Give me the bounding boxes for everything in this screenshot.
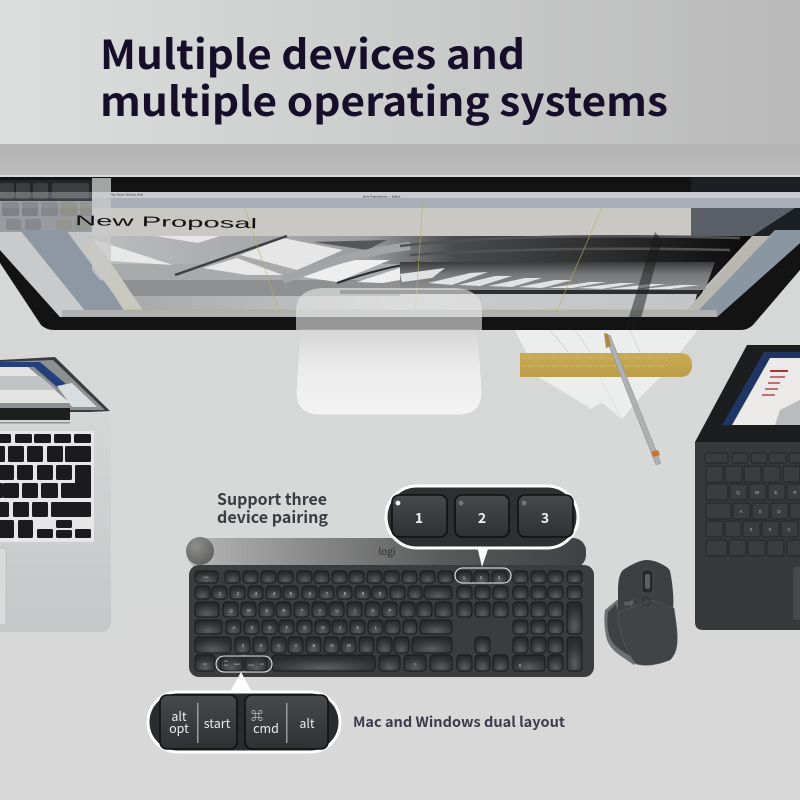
tablet keys: C bbox=[787, 527, 791, 532]
key 3: 3 bbox=[541, 508, 549, 528]
key row 4: F bbox=[286, 625, 289, 630]
mouse body bbox=[618, 560, 677, 665]
tablet keys: D bbox=[777, 509, 781, 514]
key row 5: V bbox=[295, 643, 298, 648]
key row 5: N bbox=[330, 643, 334, 648]
key row 4: L bbox=[375, 625, 378, 630]
callout: dual layout keys bbox=[148, 672, 340, 752]
key row 6: opt bbox=[224, 663, 228, 667]
key row 3: O bbox=[371, 608, 375, 613]
key row 4: A bbox=[233, 625, 236, 630]
callout: device pairing keys bbox=[386, 486, 578, 567]
capsule bbox=[148, 692, 340, 752]
key row 3: E bbox=[266, 608, 269, 613]
pale reflection strip bbox=[62, 310, 717, 317]
key row 5: B bbox=[313, 643, 316, 648]
laptop keyboard bbox=[0, 431, 94, 542]
mouse thumb rest bbox=[604, 600, 650, 665]
key 1: 1 bbox=[415, 508, 423, 528]
mouse logo: logi bbox=[624, 600, 635, 608]
key row 3: Y bbox=[319, 608, 322, 613]
key alt opt start bbox=[160, 695, 237, 749]
key row 5 bbox=[195, 637, 582, 671]
keyboard dial bbox=[186, 537, 214, 565]
monitor bbox=[0, 144, 800, 330]
ring: device keys bbox=[455, 568, 511, 583]
ring: modifier keys bbox=[216, 656, 272, 672]
key alt opt start: start bbox=[204, 713, 231, 732]
top menu bar bbox=[0, 192, 800, 208]
mouse thumb button bbox=[643, 598, 650, 605]
skylight slivers bbox=[400, 268, 700, 289]
monitor stand bbox=[296, 330, 482, 415]
top-right dark reflection bbox=[691, 177, 800, 243]
translucent laptop edge reflection bbox=[92, 178, 111, 280]
slide architecture photo bbox=[90, 236, 752, 310]
tablet bbox=[695, 345, 800, 630]
tablet keys: E bbox=[774, 490, 778, 495]
key row 1: 3 bbox=[498, 575, 501, 580]
skylight band bbox=[400, 262, 715, 290]
key row 6: ctrl bbox=[203, 662, 207, 666]
key row 2: 5 bbox=[290, 591, 293, 596]
key row 3: Q bbox=[229, 608, 233, 613]
key 1 bbox=[392, 495, 447, 537]
title band background bbox=[0, 0, 800, 144]
tablet trackpad bbox=[793, 567, 800, 620]
key row 1: 2 bbox=[480, 575, 483, 580]
key cmd alt bbox=[245, 695, 328, 749]
tablet keys: A bbox=[739, 509, 743, 514]
key row 3: R bbox=[282, 608, 286, 613]
key row 2: 6 bbox=[309, 591, 312, 596]
key row 6 bbox=[195, 655, 563, 671]
key row 6: alt bbox=[224, 659, 228, 663]
laptop body bbox=[0, 412, 111, 632]
key row 2 bbox=[195, 586, 582, 599]
key row 2: 2 bbox=[237, 591, 240, 596]
key row 5: Z bbox=[242, 643, 245, 648]
laptop hinge bbox=[0, 408, 70, 424]
key row 2: 0 bbox=[379, 591, 382, 596]
key row 1: 1 bbox=[463, 575, 466, 580]
slide page right side bbox=[691, 208, 795, 236]
mouse scroll wheel bbox=[642, 570, 653, 593]
key row 1 bbox=[195, 571, 582, 583]
title: Multiple devices and bbox=[100, 23, 525, 81]
key cmd alt: ⌘ bbox=[251, 707, 263, 724]
key row 6: start bbox=[234, 662, 240, 666]
slide page bbox=[92, 208, 691, 236]
key row 5: M bbox=[347, 643, 351, 648]
laptop bbox=[0, 357, 111, 632]
key row 4 bbox=[195, 620, 563, 634]
key row 4: J bbox=[339, 625, 341, 630]
beige slide edge right bbox=[686, 236, 770, 312]
key 2 bbox=[455, 495, 509, 537]
tablet keyboard cover bbox=[695, 442, 800, 630]
tablet keys: S bbox=[758, 509, 762, 514]
key row 2: 9 bbox=[362, 591, 365, 596]
mouse bbox=[604, 560, 677, 665]
key row 6: cmd bbox=[248, 663, 254, 667]
top-left laptop reflection bbox=[0, 180, 92, 317]
key row 3: I bbox=[354, 608, 356, 613]
brass ruler bbox=[520, 353, 692, 377]
yellow guide lines bbox=[125, 200, 690, 315]
monitor silver top bezel bbox=[0, 144, 800, 176]
key 3 bbox=[518, 495, 573, 537]
key row 2: 8 bbox=[344, 591, 347, 596]
key alt opt start: opt bbox=[169, 718, 189, 737]
top menu bar: New Proposal.key — Edited bbox=[363, 194, 401, 198]
beige slide edge left bbox=[85, 238, 143, 312]
key row 4: G bbox=[303, 625, 307, 630]
tablet keys: W bbox=[755, 490, 760, 495]
monitor black frame bbox=[0, 177, 800, 330]
laptop screen bbox=[0, 357, 110, 413]
capsule bbox=[386, 486, 578, 548]
key 2: 2 bbox=[478, 508, 486, 528]
mouse thumb rest inner bbox=[607, 604, 632, 657]
key row 1: esc bbox=[204, 575, 209, 579]
top menu bar: Play Share Window Help bbox=[110, 192, 144, 196]
tablet keys: Z bbox=[750, 527, 753, 532]
slide title: New Proposal bbox=[75, 212, 257, 231]
key row 6: 0 bbox=[519, 663, 522, 668]
key row 5: C bbox=[277, 643, 281, 648]
key row 3: P bbox=[389, 608, 392, 613]
key row 3: U bbox=[335, 608, 339, 613]
key row 6: alt bbox=[260, 662, 264, 666]
papers bbox=[512, 325, 702, 420]
label: support three device pairing: Support three bbox=[217, 486, 327, 510]
key row 3 bbox=[195, 602, 582, 634]
pointer bbox=[477, 546, 489, 567]
key row 4: S bbox=[251, 625, 254, 630]
keyboard bbox=[186, 537, 594, 677]
key row 6: fn bbox=[414, 662, 417, 666]
tablet keys bbox=[705, 453, 800, 556]
title: multiple operating systems bbox=[100, 70, 668, 128]
key row 4: K bbox=[357, 625, 360, 630]
mouse lower shell bbox=[618, 600, 677, 665]
title bbox=[100, 23, 668, 128]
key row 2: 3 bbox=[255, 591, 258, 596]
key cmd alt: cmd bbox=[253, 718, 279, 737]
label: support three device pairing: device pairing bbox=[217, 504, 328, 528]
key row 3: T bbox=[301, 608, 304, 613]
pen reflection bbox=[625, 232, 662, 330]
key row 5: X bbox=[260, 643, 263, 648]
monitor stand ghost bbox=[296, 288, 482, 330]
keyboard body bbox=[189, 565, 594, 677]
key row 4: D bbox=[268, 625, 272, 630]
key cmd alt: alt bbox=[299, 713, 315, 732]
tablet screen bbox=[695, 345, 800, 442]
keyboard top panel bbox=[187, 538, 586, 568]
label: mac and windows dual layout: Mac and Windows dual layout bbox=[353, 712, 565, 732]
pointer bbox=[230, 672, 252, 692]
key alt opt start: alt bbox=[171, 706, 187, 725]
laptop trackpad bbox=[0, 548, 6, 625]
key row 3: W bbox=[247, 608, 252, 613]
tablet keys: Q bbox=[736, 490, 740, 495]
blue side strips bbox=[20, 230, 800, 317]
key row 2: 1 bbox=[219, 591, 222, 596]
tablet keys: R bbox=[793, 490, 797, 495]
key row 4: H bbox=[321, 625, 325, 630]
monitor screen bbox=[0, 177, 800, 330]
label: support three device pairing bbox=[217, 486, 328, 528]
pen bbox=[604, 333, 661, 465]
key row 2: 4 bbox=[273, 591, 276, 596]
tablet keys: X bbox=[768, 527, 772, 532]
keyboard logo: logi bbox=[378, 543, 396, 558]
key row 2: 7 bbox=[326, 591, 329, 596]
